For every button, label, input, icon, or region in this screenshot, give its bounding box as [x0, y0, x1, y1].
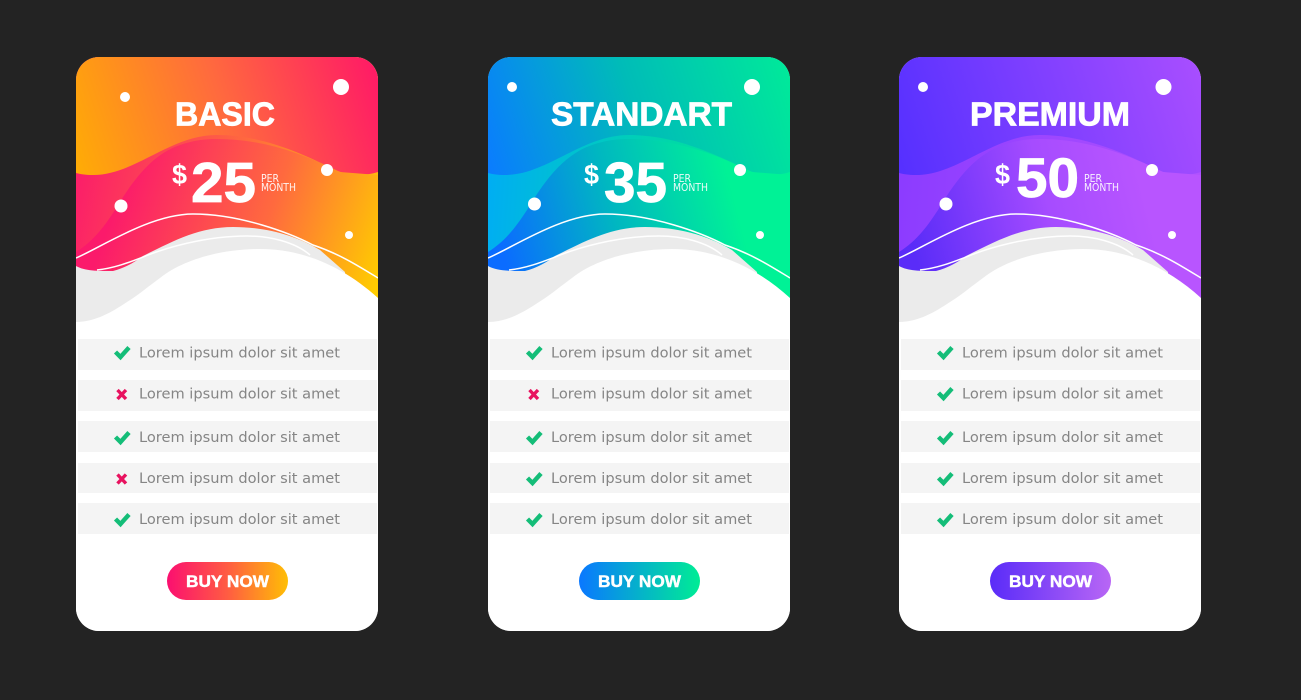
decorative dots: standart [507, 79, 764, 239]
feature list: premium: Lorem ipsum dolor sit amet [962, 346, 1164, 362]
feature list: standart: Lorem ipsum dolor sit amet [551, 346, 753, 362]
title: premium: PREMIUM [970, 96, 1130, 132]
decorative dots: premium [918, 79, 1176, 239]
title: standart: STANDART [551, 96, 732, 132]
card waves: basic [76, 57, 378, 631]
feature list: basic: Lorem ipsum dolor sit amet [139, 512, 341, 528]
feature list: premium: Lorem ipsum dolor sit amet [962, 386, 1164, 402]
price: premium: PER [1084, 173, 1102, 185]
card waves: premium [899, 57, 1201, 631]
button: buy now premium: BUY NOW [1009, 572, 1093, 591]
button: buy now premium [990, 562, 1111, 600]
feature list: standart: Lorem ipsum dolor sit amet [551, 512, 753, 528]
feature list: premium [901, 339, 1200, 534]
feature list: basic [78, 339, 377, 534]
card waves: standart [488, 57, 790, 631]
decorative dots: basic [114, 79, 353, 239]
price: standart: MONTH [673, 182, 708, 194]
price: premium: MONTH [1084, 182, 1119, 194]
feature list: premium: Lorem ipsum dolor sit amet [962, 471, 1164, 487]
feature list: premium: Lorem ipsum dolor sit amet [962, 430, 1164, 446]
price: basic [172, 151, 296, 215]
price: standart: PER [673, 173, 691, 185]
price: standart: $ [584, 159, 599, 190]
button: buy now basic [167, 562, 288, 600]
feature list: basic: Lorem ipsum dolor sit amet [139, 386, 341, 402]
price: premium [995, 146, 1119, 209]
feature list: basic: Lorem ipsum dolor sit amet [139, 471, 341, 487]
price: premium: $ [995, 159, 1010, 190]
feature list: premium: Lorem ipsum dolor sit amet [962, 512, 1164, 528]
button: buy now standart [579, 562, 700, 600]
button: buy now basic: BUY NOW [186, 572, 270, 591]
price: basic: 25 [191, 151, 256, 215]
feature list: basic: Lorem ipsum dolor sit amet [139, 346, 341, 362]
feature list: standart: Lorem ipsum dolor sit amet [551, 471, 753, 487]
price: standart [584, 151, 708, 215]
price: premium: 50 [1016, 146, 1079, 209]
title: basic: BASIC [175, 96, 275, 132]
price: standart: 35 [604, 151, 667, 215]
panel: premium plan [899, 57, 1201, 631]
feature list: basic: Lorem ipsum dolor sit amet [139, 430, 341, 446]
button: buy now standart: BUY NOW [598, 572, 682, 591]
panel: basic plan [76, 57, 378, 631]
price: basic: $ [172, 159, 187, 190]
price: basic: MONTH [261, 182, 296, 194]
price: basic: PER [261, 173, 279, 185]
feature list: standart: Lorem ipsum dolor sit amet [551, 430, 753, 446]
feature list: standart [490, 339, 789, 534]
panel: standart plan [488, 57, 790, 631]
feature list: standart: Lorem ipsum dolor sit amet [551, 386, 753, 402]
